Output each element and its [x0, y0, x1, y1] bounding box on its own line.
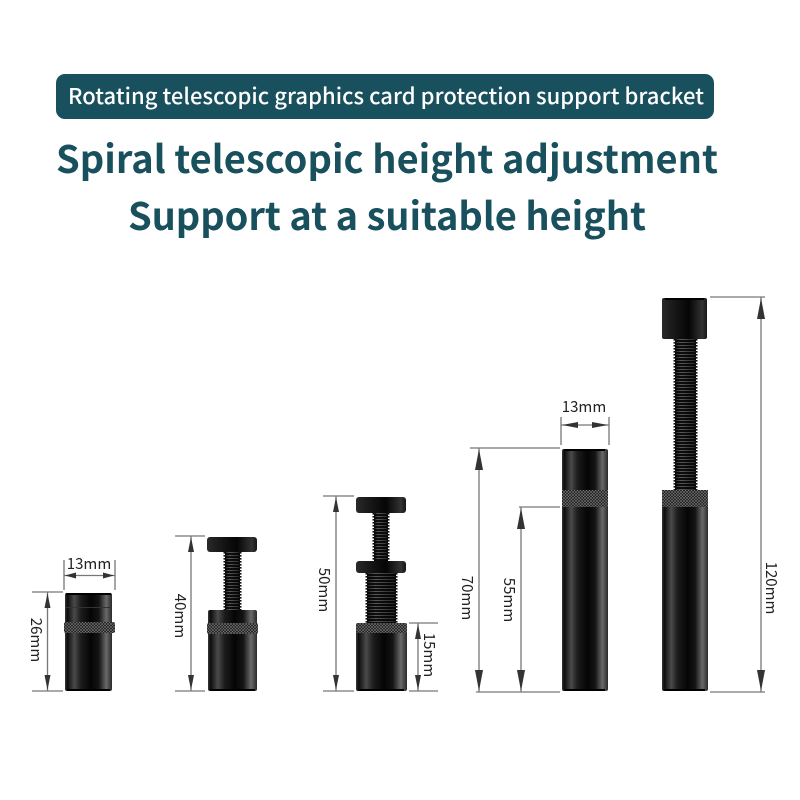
- product 2: extended 40mm: [170, 536, 258, 691]
- title: [56, 129, 718, 241]
- height dimension 55mm: [499, 507, 560, 692]
- height dimension 26mm: 26mm: [26, 618, 47, 662]
- product 5: long extended 120mm: [662, 297, 782, 692]
- height dimension 70mm: [457, 448, 560, 692]
- height dimension 50mm: [314, 496, 354, 691]
- product 1: retracted 26mm: [26, 553, 115, 691]
- header banner: [56, 74, 714, 119]
- cap: [662, 298, 707, 339]
- height dimension 50mm: 50mm: [314, 568, 335, 612]
- thread: [675, 339, 696, 490]
- lower thread: [367, 573, 396, 623]
- collar: [356, 561, 406, 573]
- body: [662, 490, 708, 691]
- height dimension 120mm: [710, 297, 782, 692]
- body: [356, 623, 407, 691]
- knurl band: [562, 490, 608, 507]
- height dimension 15mm: [409, 623, 440, 691]
- height dimension 40mm: [170, 536, 205, 691]
- knurl band: [207, 623, 258, 634]
- cap: [207, 537, 257, 552]
- height dimension 70mm: 70mm: [457, 576, 478, 620]
- banner text: Rotating telescopic graphics card protection support bracket: [68, 79, 704, 111]
- upper thread: [374, 513, 388, 561]
- height dimension 120mm: 120mm: [761, 562, 782, 614]
- thread: [225, 552, 240, 610]
- height dimension 40mm: 40mm: [170, 594, 191, 638]
- product 4: long retracted 70mm: [457, 396, 609, 692]
- width dimension 13mm: 13mm: [67, 553, 111, 574]
- product 3: extended 50mm: [314, 496, 440, 691]
- knurl band: [356, 623, 407, 633]
- knurl band: [662, 490, 708, 507]
- width dimension 13mm: 13mm: [562, 396, 606, 417]
- body: [65, 593, 112, 691]
- title line 1: Spiral telescopic height adjustment: [56, 129, 718, 184]
- cap: [356, 497, 406, 513]
- height dimension 15mm: 15mm: [419, 633, 440, 677]
- title line 2: Support at a suitable height: [128, 186, 646, 241]
- width dimension 13mm: [561, 396, 609, 445]
- body: [562, 449, 608, 691]
- body: [208, 610, 257, 691]
- height dimension 55mm: 55mm: [499, 578, 520, 622]
- knurl band: [64, 622, 115, 633]
